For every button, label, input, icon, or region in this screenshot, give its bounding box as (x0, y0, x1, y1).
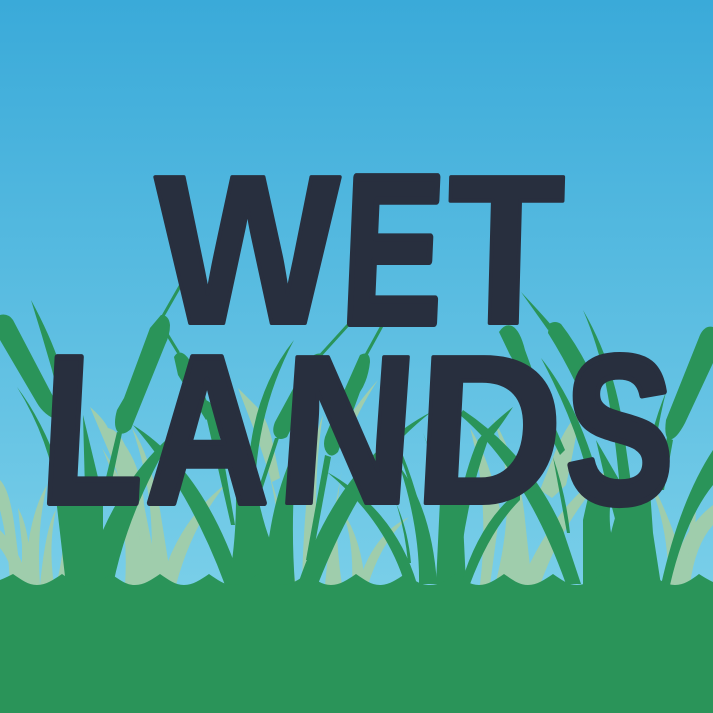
title line 1: WET (155, 131, 567, 369)
cattail: far left head (0, 315, 57, 420)
reed clump 2: centre (133, 324, 431, 585)
ground with scalloped edge (0, 574, 713, 713)
background pale reeds (0, 380, 713, 585)
cattail: centre head (258, 325, 348, 490)
title line 1: WET: W (155, 132, 340, 369)
cattail: inner head (499, 325, 565, 455)
pale reeds: inner-right clump (342, 412, 613, 585)
title line 1: WET: T (444, 131, 567, 368)
reed clump 1: left (0, 281, 183, 585)
pale reeds: far left clump (0, 480, 56, 585)
reed clump 4: right (499, 292, 713, 585)
cattail: behind A (167, 334, 235, 525)
title line 2: LANDS: A (145, 311, 269, 548)
cattail: far right head (658, 327, 713, 490)
cattail: centre-left head (103, 281, 183, 490)
pale reeds: centre-left clump (56, 407, 227, 585)
title line 2: LANDS: D (410, 312, 569, 549)
pale reeds: right clump (640, 462, 713, 585)
title line 2: LANDS (36, 311, 674, 549)
title line 2: LANDS: S (565, 313, 674, 549)
cattail: behind N (306, 324, 383, 560)
foreground green reeds (0, 281, 713, 585)
title line 2: LANDS: L (36, 311, 152, 548)
title: WETLANDS (36, 131, 674, 549)
title line 1: WET: E (338, 131, 448, 368)
cattail: right of D head (521, 292, 588, 388)
title line 2: LANDS: N (271, 311, 424, 548)
reed clump 3: inner-right (381, 407, 581, 584)
pale reeds: centre clump (238, 380, 378, 585)
